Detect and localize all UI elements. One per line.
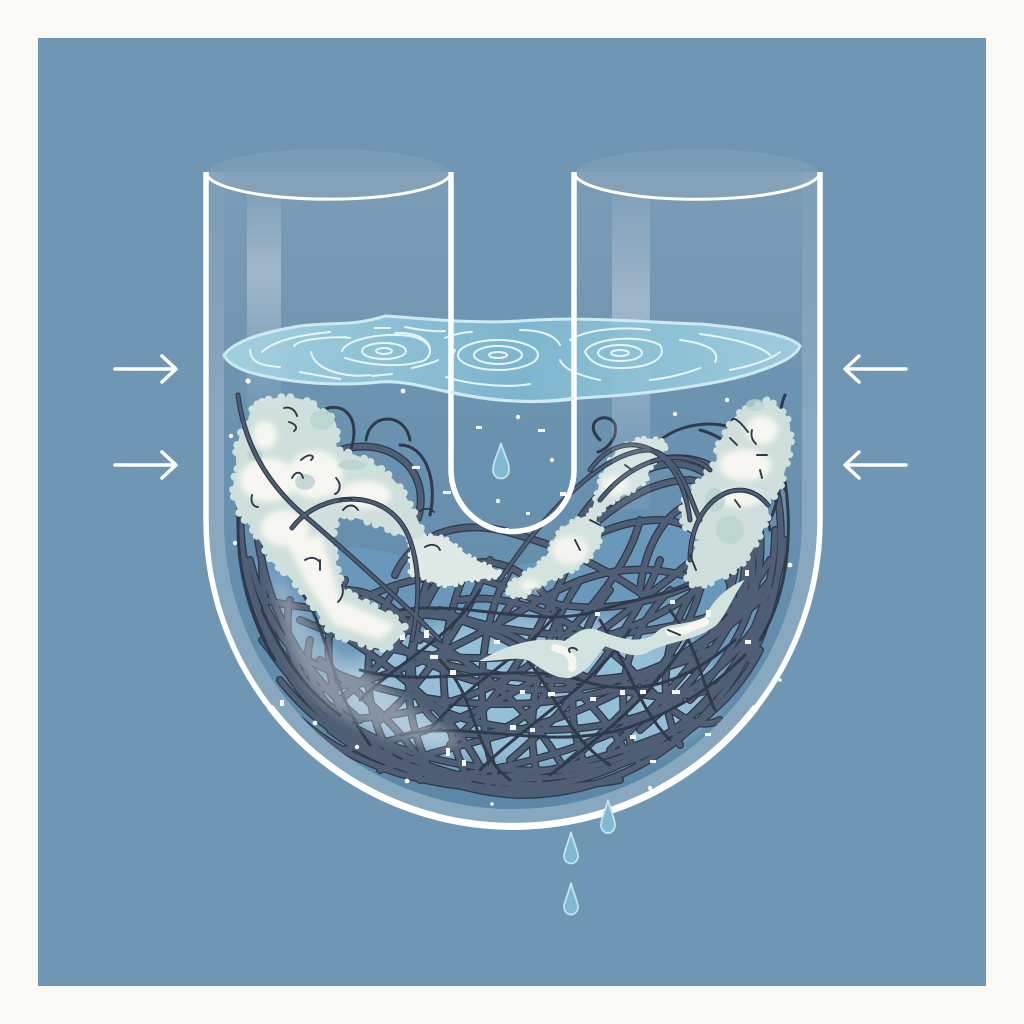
water surface front edge over inner pipe — [451, 392, 574, 401]
pipe: water body — [224, 365, 802, 809]
pipe: tube top openings — [206, 149, 820, 199]
arrow: upper left — [115, 356, 176, 382]
foam: left clump — [233, 397, 422, 649]
particles: white debris — [229, 378, 792, 806]
tangle: dark hair strands — [238, 395, 788, 795]
foam: right clump — [682, 399, 791, 587]
highlight: right tube vertical reflection — [612, 195, 650, 510]
pipe: upper tube glass fill — [206, 172, 820, 385]
highlight: left tube vertical reflection — [247, 195, 281, 410]
foam: small dark curl marks — [251, 408, 767, 652]
foam: patch between strands — [410, 536, 505, 586]
arrow: lower right — [845, 452, 906, 478]
pipe: white inner outline — [451, 172, 574, 532]
icon: water drop inside U — [493, 443, 509, 478]
tangle: light gaps behind strands — [254, 514, 771, 771]
foam: centre-right clump — [505, 439, 668, 598]
pipe: glass wall band — [206, 172, 820, 827]
highlight: grey glass reflection over strands — [273, 570, 463, 746]
icon: water drop falling — [564, 832, 578, 864]
arrow: upper right — [845, 356, 906, 382]
foam: wispy horizontal streak — [483, 582, 742, 677]
water surface with ripples — [224, 316, 800, 402]
pipe: thicker lower outline — [270, 707, 756, 826]
pipe: white outer outline — [206, 172, 820, 827]
icon: water drop lowest — [564, 883, 578, 915]
icon: water drop on pipe — [601, 800, 615, 833]
arrow: lower left — [115, 452, 176, 478]
tangle: strands crossing over foam — [238, 395, 768, 640]
